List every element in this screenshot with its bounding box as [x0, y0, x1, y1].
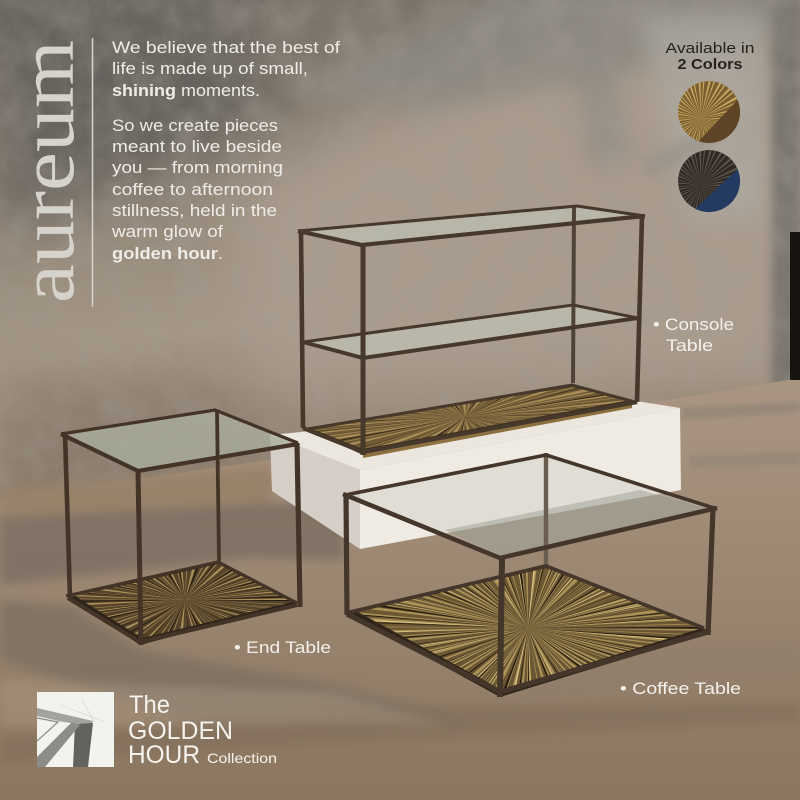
- coffee table frame: [343, 453, 717, 697]
- intro text: first paragraph: [112, 38, 340, 100]
- collection title: Collection: [207, 750, 277, 766]
- coffee table: [343, 453, 717, 700]
- collection title: GOLDEN: [128, 717, 233, 745]
- product label: console table: • Console: [653, 315, 734, 334]
- product label: console table: Table: [666, 336, 713, 355]
- intro text: first paragraph: life is made up of small,: [112, 59, 308, 78]
- window edge: [790, 232, 800, 380]
- coffee table gold base: [345, 556, 712, 700]
- coffee table glass top: [343, 453, 717, 558]
- end table glass top: [61, 410, 298, 470]
- white display platform: [270, 400, 681, 549]
- intro text: second paragraph: warm glow of: [111, 222, 223, 241]
- collection logo: sketch of table corner: [37, 692, 114, 767]
- colour availability heading: 2 Colors: [678, 56, 742, 73]
- collection title: HOUR: [128, 741, 200, 769]
- intro text: second paragraph: meant to live beside: [112, 137, 282, 156]
- collection title: The: [129, 691, 170, 719]
- wall: [0, 0, 800, 520]
- intro text: second paragraph: So we create pieces: [112, 116, 278, 135]
- intro text: first paragraph: We believe that the best of: [112, 38, 340, 57]
- product label: end table: • End Table: [234, 638, 331, 657]
- intro text: second paragraph: [111, 116, 283, 263]
- intro text: second paragraph: stillness, held in the: [112, 201, 277, 220]
- product label: coffee table: • Coffee Table: [620, 679, 741, 698]
- collection title: [128, 691, 277, 769]
- divider line: [92, 38, 94, 307]
- intro text: second paragraph: you — from morning: [112, 158, 283, 177]
- intro text: second paragraph: golden hour .: [112, 244, 223, 263]
- swatch: dark with navy: [678, 150, 740, 212]
- colour availability heading: [666, 40, 754, 73]
- intro text: first paragraph: shining moments.: [112, 81, 260, 100]
- console table gold base: [308, 386, 632, 458]
- swatch: gold: [678, 81, 740, 143]
- console table: [297, 206, 645, 460]
- end table frame: [61, 410, 300, 645]
- intro text: second paragraph: coffee to afternoon: [112, 180, 273, 199]
- end table: [61, 410, 300, 645]
- brand name: aureum: aureum: [3, 40, 90, 303]
- floor light and shadow bands: [0, 465, 272, 525]
- end table gold base: [70, 560, 300, 645]
- console table glass shelves: [298, 206, 645, 243]
- product label: console table: [653, 315, 734, 355]
- console table frame: [298, 206, 645, 455]
- colour availability heading: Available in: [666, 40, 754, 57]
